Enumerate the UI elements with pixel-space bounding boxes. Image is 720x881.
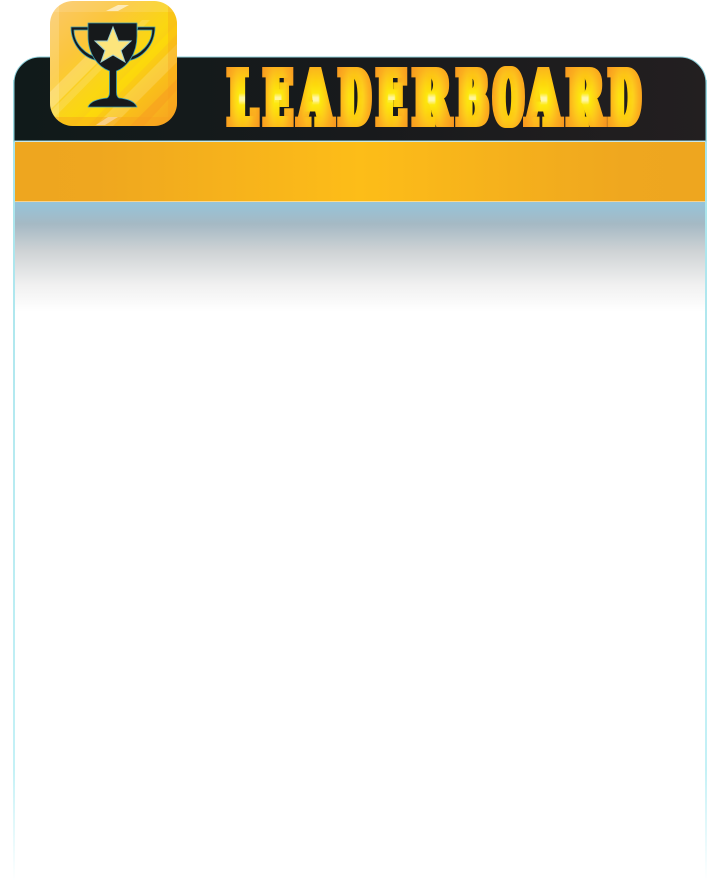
title: LEADERBOARD: O	[494, 56, 523, 142]
title: LEADERBOARD: B	[457, 56, 488, 142]
title: LEADERBOARD: L	[228, 56, 257, 142]
icon: trophy badge	[50, 1, 177, 126]
title: LEADERBOARD: A	[526, 56, 561, 142]
icon: star	[95, 27, 131, 62]
header bar	[14, 57, 706, 141]
title: LEADERBOARD: R	[413, 56, 450, 142]
title: LEADERBOARD: E	[377, 56, 406, 142]
title: LEADERBOARD: E	[264, 56, 292, 142]
blue-grey fade	[15, 202, 705, 312]
orange band	[15, 142, 705, 202]
leaderboard infographic: D	[609, 56, 640, 142]
title: LEADERBOARD: D	[339, 56, 370, 142]
title: LEADERBOARD	[228, 56, 640, 142]
icon: trophy	[71, 23, 155, 107]
title: LEADERBOARD: R	[567, 56, 603, 142]
title: LEADERBOARD: A	[298, 56, 333, 142]
